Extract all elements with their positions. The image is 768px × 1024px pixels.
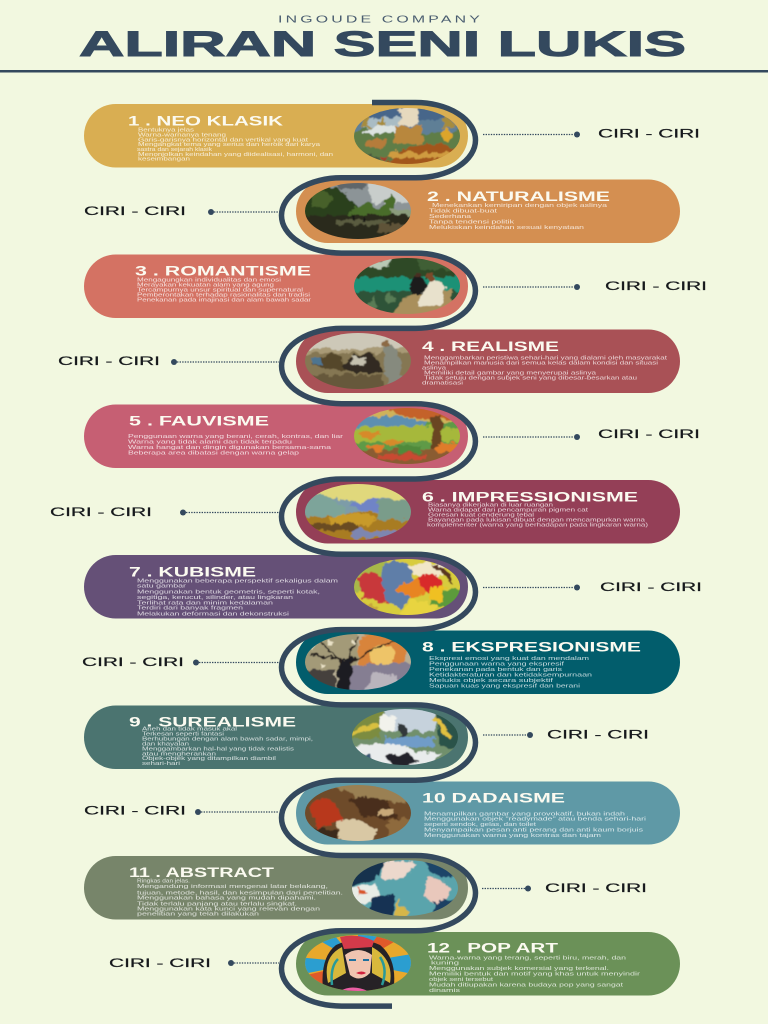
body text: Menekankan kemiripan dengan objek aslinya [432,203,607,209]
body text: Objek-objek yang ditampilkan diambil [142,756,276,762]
body text: dinamis [429,988,461,994]
body text: Sapuan kuas yang ekspresif dan berani [429,684,580,690]
callout: ciri 6 [50,507,279,519]
body text [137,879,343,918]
heading: 7 . KUBISME [129,564,256,580]
body text: Ketidakteraturan dan ketidaksempurnaan [429,672,592,678]
pill [84,555,468,618]
callout: ciri 11: CIRI - CIRI [545,883,647,895]
body text: Penekanan pada bentuk dan garis [429,667,563,673]
pill [296,630,680,694]
header rule [0,70,768,72]
body text: Menggunakan kata kunci yang relevan dengan [137,906,320,912]
body text: penelitian yang telah dilakukan [137,912,259,918]
pill [84,706,468,769]
panel: impressionisme [296,477,680,547]
callout: ciri 1 [483,128,700,140]
painting: impressionisme [305,484,411,540]
body text: Beberapa area dibatasi dengan warna gelap [128,450,299,456]
callout: ciri 12: CIRI - CIRI [109,958,211,970]
body text: sastra dan sejarah klasik [137,147,212,153]
pill [84,856,468,920]
callout: ciri 11 [482,883,647,895]
body text: Menggunakan beberapa perspektif sekaligus dalam [137,578,339,584]
pill [84,404,468,468]
body text: segitiga, kerucut, silinder, atau lingkaran [137,595,293,601]
body text [429,656,592,690]
body text: Tidak setuju dengan subjek seni yang dibesar-besarkan atau [424,375,637,381]
panel: neo klasik [84,101,468,171]
body text: Menggunakan bahasa yang mudah dipahami. [137,896,316,902]
body text: Ringkas dan jelas. [137,879,190,885]
body text: Tercampurnya unsur spiritual dan supernatural [137,288,303,294]
panel: realisme [296,326,680,396]
panel: kubisme [84,552,468,622]
body text: Terlihat rata dan minim kedalaman [137,600,273,606]
body text: komplementer (warna yang berhadapan pada lingkaran warna) [427,522,648,528]
panel: pop art [296,928,680,998]
callout: ciri 9 [483,730,649,742]
pill [296,180,680,243]
body text: kuning [431,961,459,967]
heading: 1 . NEO KLASIK [128,114,283,128]
body text: Biasanya dikerjakan di luar ruangan [428,503,553,509]
callout: ciri 7 [483,582,702,594]
callout: ciri 1: CIRI - CIRI [598,128,700,140]
body text [424,811,646,839]
panel: dadaisme [296,778,680,848]
body text: Mengagungkan individualitas dan emosi [137,278,281,284]
body text: Penggunaan warna yang berani, cerah, kontras, dan liar [128,434,343,440]
heading: 4 . REALISME [422,339,559,354]
painting: abstract [352,860,458,916]
pill [296,932,680,996]
body text [137,578,339,617]
panel: naturalisme [296,176,680,246]
panel: ekspresionisme [296,627,680,697]
body text: Penekanan pada imajinasi dan alam bawah sadar [137,298,311,304]
callout: ciri 5 [483,429,700,441]
body text: Menggunakan bentuk geometris, seperti kotak, [137,589,320,595]
heading: 12 . POP ART [427,940,559,956]
painting: kubisme [354,559,460,615]
body text: Pemberontakan terhadap rasionalitas dan tradisi [137,293,310,299]
body text: sehari-hari [142,761,180,767]
body text: Terdiri dari banyak fragmen [137,606,243,612]
body text: Menggambarkan hal-hal yang tidak realistis [142,746,295,752]
body text: Menggambarkan peristiwa sehari-hari yang dialami oleh masyarakat [424,356,668,362]
header subtitle: INGOUDE COMPANY [278,14,483,26]
body text: Aneh dan tidak masuk akal [142,727,237,733]
body text: Memiliki bentuk dan motif yang khas untuk menyindir [429,971,640,977]
body text: Sederhana [429,214,471,220]
serpentine connector line [281,102,476,1006]
body text: Melukis objek secara subjektif [429,678,554,684]
callout: ciri 7: CIRI - CIRI [600,582,702,594]
callout: ciri 5: CIRI - CIRI [598,429,700,441]
heading: 5 . FAUVISME [129,414,269,428]
body text: Menggunakan objek "readymade" atau benda sehari-hari [424,817,646,823]
body text: tujuan, metode, hasil, dan kesimpulan dari penelitian. [137,890,343,896]
body text: Menampilkan manusia dari semua kelas dalam kondisi dan situasi [424,361,658,367]
heading: 11 . ABSTRACT [129,865,275,880]
body text: Berhubungan dengan alam bawah sadar, mimpi, [142,736,313,742]
callout: ciri 8 [82,657,279,669]
callout: ciri 12 [109,958,279,970]
callout: ciri 10 [84,806,279,818]
painting: neo klasik [354,108,460,164]
body text: Warna didapat dari pencampuran pigmen cat [428,507,589,513]
painting: ekspresionisme [305,634,411,690]
body text [422,356,668,386]
body text: Warna hangat dan dingin digunakan bersama-sama [128,445,331,451]
body text [137,127,333,163]
body text: Warna-warnanya tenang [138,132,226,138]
body text: Warna yang tidak alami dan tidak terpadu [128,440,292,446]
body text [427,503,648,528]
heading: 6 . IMPRESSIONISME [422,490,638,504]
panel: romantisme [84,251,468,321]
body text: Tanpa tendensi politik [429,220,515,226]
body text: Tidak terlalu panjang atau terlalu singkat. [137,901,297,907]
body text: seperti sendok, gelas, dan toilet [424,822,537,828]
heading: 3 . ROMANTISME [135,264,311,278]
body text: Warna-warna yang terang, seperti biru, merah, dan [429,955,626,961]
body text: Ekspresi emosi yang kuat dan mendalam [429,656,590,662]
heading: 8 . EKSPRESIONISME [422,640,641,654]
body text: Menampilkan gambar yang provokatif, bukan indah [424,811,625,817]
body text: Goresan kuat cenderung tebal [428,512,534,518]
painting: surealisme [352,709,458,765]
body text: Menyampaikan pesan anti perang dan anti kaum borjuis [424,828,644,834]
body text: Memiliki detail gambar yang menyerupai aslinya [424,370,596,376]
heading: 10 DADAISME [422,790,565,806]
body text: aslinya [422,366,446,372]
body text: Merayakan kekuatan alam yang agung [137,283,274,289]
body text: Bayangan pada lukisan dibuat dengan mencampurkan warna [428,517,645,523]
painting: fauvisme [354,408,460,464]
pill [296,480,680,544]
callout: ciri 2: CIRI - CIRI [84,206,186,218]
body text: atau mengherankan [142,751,216,757]
body text [128,434,343,456]
painting: realisme [305,333,411,389]
body text: keseimbangan [138,157,190,163]
body text: satu gambar [137,584,186,590]
body text: Mengandung informasi mengenai latar belakang, [137,884,328,890]
body text: Mengangkat tema yang serius dan heroik dari karya [138,142,320,148]
body text: Tidak dibuat-buat [429,209,498,215]
panel: surealisme [84,702,468,772]
body text [142,727,313,767]
body text [429,955,640,994]
body text: dan khayalan [142,741,189,747]
body text: Mudah ditiupakan karena budaya pop yang sangat [429,982,624,988]
painting: pop art [305,935,411,991]
callout: ciri 2 [84,206,279,218]
pill [84,254,468,318]
pill [296,330,680,393]
body text [429,203,607,231]
body text: objek seni tersebut [429,977,494,983]
body text: Menonjolkan keindahan yang diidealisasi, harmoni, dan [138,152,333,158]
callout: ciri 10: CIRI - CIRI [84,806,186,818]
callout: ciri 8: CIRI - CIRI [82,657,184,669]
body text [137,278,311,304]
painting: romantisme [354,258,460,314]
heading: 2 . NATURALISME [427,189,610,204]
callout: ciri 3: CIRI - CIRI [605,281,707,293]
body text: Penggunaan warna yang ekspresif [429,662,565,668]
body text: Terkesan seperti fantasi [142,732,224,738]
body text: Melakukan deformasi dan dekonstruksi [137,611,289,617]
pill [84,104,468,168]
body text: Bentuknya jelas [138,127,195,133]
callout: ciri 3 [483,281,707,293]
painting: dadaisme [305,785,411,841]
callout: ciri 9: CIRI - CIRI [547,730,649,742]
body text: Garis-garisnya horizontal dan vertikal yang kuat [138,137,309,143]
heading: 9 . SUREALISME [129,714,296,730]
title: ALIRAN SENI LUKIS [79,25,686,64]
panel: abstract [84,853,468,923]
body text: Menggunakan subjek komersial yang terkenal. [429,966,609,972]
body text: Menggunakan warna yang kontras dan tajam [424,833,602,839]
pill [296,782,680,844]
callout: ciri 4: CIRI - CIRI [58,356,160,368]
callout: ciri 6: CIRI - CIRI [50,507,152,519]
panel: fauvisme [84,401,468,471]
callout: ciri 4 [58,356,279,368]
body text: dramatisasi [422,380,463,386]
painting: naturalisme [305,183,411,239]
body text: Melukiskan keindahan sesuai kenyataan [429,225,584,231]
